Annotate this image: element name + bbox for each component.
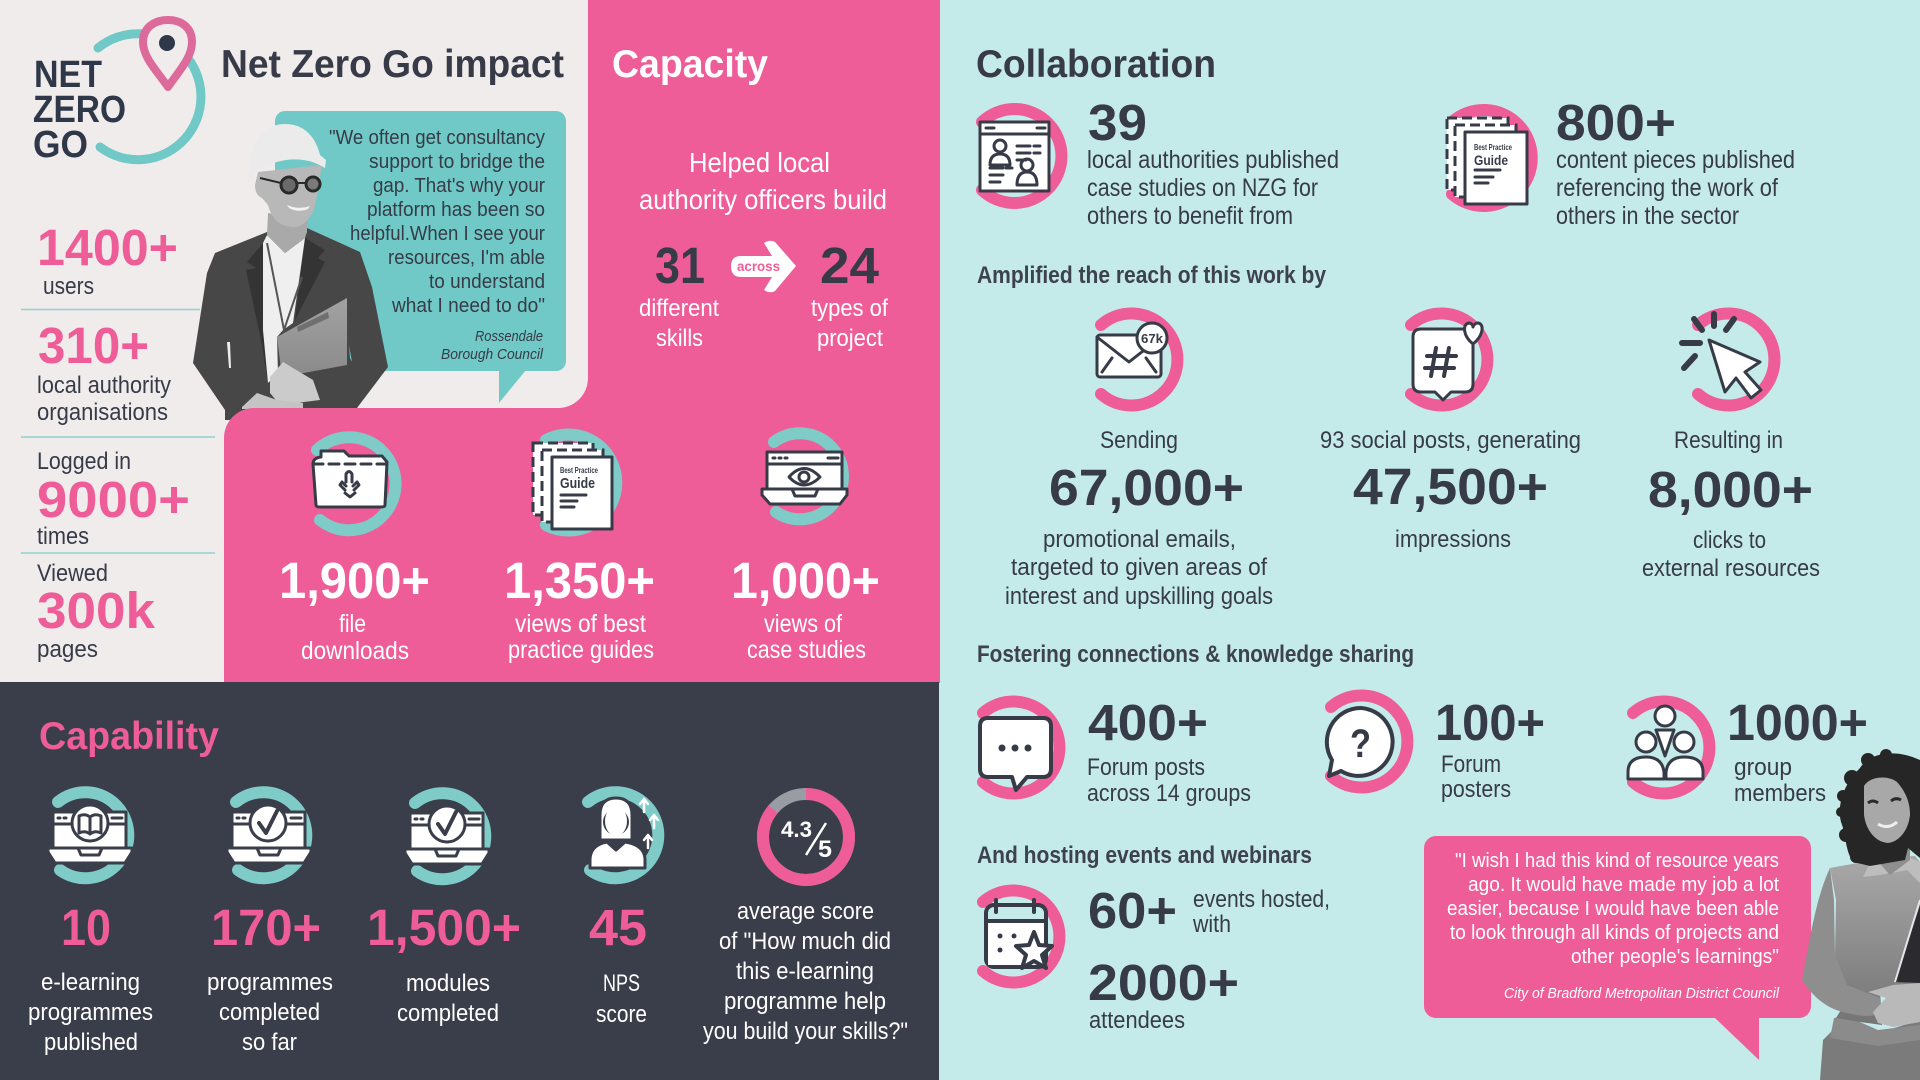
title: Net Zero Go impact: [221, 43, 564, 86]
icon: case study window: [980, 109, 1061, 203]
callout: Bradford quote: to look through all kinds of projects and: [1450, 922, 1779, 944]
stat: 400+ forum posts: across 14 groups: [1087, 780, 1251, 807]
arrow: across: across: [737, 258, 780, 274]
stat: 100+ forum posters: [1327, 694, 1545, 803]
callout: Bradford quote: easier, because I would have been able: [1447, 898, 1779, 920]
callout: Bradford quote: ago. It would have made my job a lot: [1468, 874, 1779, 896]
panel: capacity: [224, 0, 940, 683]
stat: 45 NPS score: NPS: [603, 970, 640, 997]
logo: Net Zero Go: [33, 20, 201, 166]
logo: Net Zero Go: NET: [34, 54, 102, 96]
donut chart: 4.3 out of 5: [763, 794, 849, 880]
stat: 47,500+ impressions: impressions: [1395, 526, 1511, 553]
stat: 39 local authorities: [980, 94, 1339, 230]
icon: calendar with star: [983, 890, 1059, 982]
stat: 67,000+ emails: [1005, 314, 1273, 610]
callout: Rossendale quote: support to bridge the: [369, 151, 545, 173]
stat: 800+ content pieces: others in the sector: [1556, 202, 1739, 230]
stat: 800+ content pieces: content pieces published: [1556, 146, 1795, 174]
donut chart: 4.3 out of 5: 4.3: [781, 817, 812, 842]
stat: 10 programmes: 10: [61, 899, 111, 956]
stat: 4.3 of 5 average score: [703, 794, 908, 1045]
stat: 1400+ users: [37, 219, 178, 300]
stat: 4.3 of 5 average score: of "How much did: [719, 928, 891, 955]
stat: 8,000+ clicks: clicks to: [1693, 527, 1766, 554]
subheading: amplified: Amplified the reach of this work by: [977, 262, 1327, 289]
stat: 310+ organisations: organisations: [37, 399, 168, 426]
panel: collaboration: [939, 0, 1920, 1080]
stat: 400+ forum posts: [980, 694, 1251, 807]
stat: 300k pages: [37, 560, 156, 663]
icon: person with rising arrows: [588, 792, 658, 878]
icon: email: [1097, 314, 1177, 406]
stat: 170+ completed: so far: [242, 1029, 297, 1056]
stat: 67,000+ emails: targeted to given areas of: [1011, 554, 1267, 581]
stat: events and attendees: events hosted,: [1193, 886, 1330, 913]
callout: Bradford quote: other people's learnings": [1571, 946, 1779, 968]
stat: 10 programmes: [28, 792, 153, 1056]
stat: 310+ organisations: [37, 317, 171, 426]
heading: collaboration: Collaboration: [976, 43, 1216, 86]
stat: 8,000+ clicks: external resources: [1642, 555, 1820, 582]
stat: 45 NPS score: score: [596, 1001, 647, 1028]
icon: laptop with eye: [762, 433, 847, 519]
stat: 10 programmes: published: [44, 1029, 138, 1056]
stat: 67,000+ emails: interest and upskilling goals: [1005, 583, 1273, 610]
icon: laptop with book: [48, 792, 132, 878]
stat: 310+ organisations: 310+: [38, 317, 149, 374]
stat: 47,500+ impressions: [1320, 314, 1581, 553]
heading: capacity: Capacity: [612, 43, 768, 86]
stat: 47,500+ impressions: 47,500+: [1353, 458, 1548, 515]
stat: 1,000+ case study views: case studies: [747, 636, 866, 664]
stat: 67,000+ emails: promotional emails,: [1043, 526, 1236, 553]
callout: Rossendale quote: gap. That's why your: [373, 175, 545, 197]
heading: capability: Capability: [39, 715, 219, 758]
stat: 300k pages: Viewed: [37, 560, 108, 587]
stat: 400+ forum posts: 400+: [1088, 694, 1208, 751]
stat: 1000+ group members: 1000+: [1727, 694, 1868, 751]
callout: Rossendale quote: Rossendale: [475, 328, 543, 345]
stat: 1,350+ guide views: 1,350+: [504, 552, 655, 609]
stat: 4.3 of 5 average score: average score: [737, 898, 874, 925]
stat: 170+ completed: programmes: [207, 969, 333, 996]
stat: 24 types of project: 24: [820, 237, 880, 294]
arrow: across: [731, 241, 796, 292]
stat: 800+ content pieces: [1447, 94, 1795, 230]
stat: 1,900+ file downloads: file: [339, 610, 366, 638]
stat: events and attendees: with: [1192, 911, 1231, 938]
stat: 8,000+ clicks: [1642, 314, 1820, 582]
stat: 1,500+ modules: 1,500+: [367, 899, 521, 956]
stat: 10 programmes: e-learning: [41, 969, 140, 996]
stat: 9000+ logins: times: [37, 523, 89, 550]
stat: events and attendees: attendees: [1089, 1007, 1185, 1034]
icon: email: 67k: [1141, 331, 1164, 346]
stat: 1,900+ file downloads: downloads: [301, 637, 409, 665]
photo: woman with folder: [1802, 749, 1920, 1080]
stat: 300k pages: pages: [37, 636, 98, 663]
stat: 100+ forum posters: Forum: [1441, 751, 1501, 778]
stat: 67,000+ emails: 67,000+: [1049, 459, 1244, 516]
icon: laptop with tick: [227, 792, 311, 878]
icon: cursor click: [1682, 314, 1774, 406]
text: helped local authority officers: Helped local: [689, 147, 830, 178]
photo: man in hard hat: [193, 124, 388, 420]
logo: Net Zero Go: GO: [33, 124, 88, 166]
stat: 1000+ group members: [1628, 694, 1868, 807]
stat: 1,900+ file downloads: 1,900+: [279, 552, 430, 609]
stat: 1000+ group members: group: [1734, 754, 1792, 781]
stat: 1,500+ modules: modules: [406, 970, 490, 997]
text: helped local authority officers: [639, 147, 887, 215]
stat: 100+ forum posters: posters: [1441, 776, 1511, 803]
stat: 47,500+ impressions: 93 social posts, generating: [1320, 427, 1581, 454]
subheading: fostering connections: Fostering connections & knowledge sharing: [977, 641, 1414, 668]
stat: 9000+ logins: [37, 448, 190, 550]
stat: 67,000+ emails: Sending: [1100, 427, 1178, 454]
icon: question bubble: [1327, 696, 1407, 788]
icon: best practice guide: [533, 434, 616, 530]
stat: 1,350+ guide views: practice guides: [508, 636, 654, 664]
subheading: events and webinars: And hosting events and webinars: [977, 842, 1312, 869]
callout: Rossendale quote: resources, I'm able: [388, 247, 545, 269]
stat: 9000+ logins: 9000+: [37, 471, 190, 528]
callout: Rossendale quote: platform has been so: [367, 199, 545, 221]
stat: 1400+ users: 1400+: [37, 219, 178, 276]
callout: Rossendale quote: "We often get consultancy: [329, 127, 545, 149]
stat: events and attendees: 2000+: [1088, 954, 1239, 1011]
icon: best practice guide: Guide: [1474, 152, 1508, 168]
stat: 39 local authorities: others to benefit from: [1087, 202, 1293, 230]
stat: 1,500+ modules: completed: [397, 1000, 499, 1027]
stat: 1,350+ guide views: views of best: [515, 610, 646, 638]
stat: 170+ completed: 170+: [211, 899, 321, 956]
callout: Bradford quote: [1424, 836, 1811, 1060]
stat: events and attendees: [983, 882, 1330, 1034]
callout: Bradford quote: "I wish I had this kind of resource years: [1455, 850, 1779, 872]
stat: 45 NPS score: [588, 792, 658, 1028]
callout: Rossendale quote: helpful.When I see your: [350, 223, 545, 245]
icon: chat bubble: [980, 702, 1059, 794]
stat: 1,900+ file downloads: [279, 437, 430, 665]
stat: 31 different skills: different: [639, 295, 719, 322]
stat: 8,000+ clicks: Resulting in: [1674, 427, 1783, 454]
stat: 1,000+ case study views: 1,000+: [731, 552, 880, 609]
icon: best practice guide: [1447, 110, 1532, 206]
stat: 1,000+ case study views: views of: [764, 610, 842, 638]
stat: 1000+ group members: members: [1734, 780, 1826, 807]
icon: best practice guide: Guide: [560, 475, 595, 492]
stat: 39 local authorities: local authorities published: [1087, 146, 1339, 174]
stat: 170+ completed: [207, 792, 333, 1056]
icon: laptop with tick: [405, 793, 489, 879]
stat: 10 programmes: programmes: [28, 999, 153, 1026]
stat: 4.3 of 5 average score: programme help: [724, 988, 886, 1015]
icon: folder: [313, 437, 396, 530]
stat: 4.3 of 5 average score: this e-learning: [736, 958, 874, 985]
stat: 31 different skills: skills: [656, 325, 703, 352]
stat: 1400+ users: users: [43, 273, 94, 300]
callout: Rossendale quote: to understand: [429, 271, 545, 293]
icon: best practice guide: Best Practice: [560, 466, 598, 475]
stat: 310+ organisations: local authority: [37, 372, 171, 399]
stat: 1,500+ modules: [367, 793, 521, 1027]
callout: Bradford quote: City of Bradford Metropolitan District Council: [1504, 985, 1780, 1002]
stat: 8,000+ clicks: 8,000+: [1648, 461, 1813, 518]
stat: 24 types of project: project: [817, 325, 883, 352]
callout: Rossendale quote: Borough Council: [441, 346, 544, 363]
text: helped local authority officers: authority officers build: [639, 184, 887, 215]
stat: 1,000+ case study views: [731, 433, 880, 664]
icon: question bubble: ?: [1350, 722, 1371, 766]
stat: 31 different skills: 31: [655, 237, 705, 294]
donut chart: 4.3 out of 5: 5: [818, 836, 832, 863]
stat: 100+ forum posters: 100+: [1435, 694, 1545, 751]
stat: 31 different skills: [639, 237, 719, 352]
stat: 24 types of project: types of: [811, 295, 888, 322]
stat: 45 NPS score: 45: [589, 899, 647, 956]
stat: 800+ content pieces: referencing the work of: [1556, 174, 1778, 202]
callout: Rossendale quote: [275, 111, 566, 403]
icon: group of people: [1628, 702, 1709, 794]
stat: 39 local authorities: case studies on NZG for: [1087, 174, 1318, 202]
stat: 170+ completed: completed: [219, 999, 320, 1026]
panel: capability: [0, 682, 939, 1080]
stat: 1,350+ guide views: [504, 434, 655, 664]
icon: social post: [1411, 314, 1487, 406]
stat: 24 types of project: [811, 237, 888, 352]
logo: Net Zero Go: ZERO: [33, 89, 126, 131]
stat: 39 local authorities: 39: [1088, 94, 1147, 151]
callout: Rossendale quote: what I need to do": [391, 295, 545, 317]
stat: 4.3 of 5 average score: you build your skills?": [703, 1018, 908, 1045]
stat: 800+ content pieces: 800+: [1556, 94, 1676, 151]
stat: 9000+ logins: Logged in: [37, 448, 131, 475]
icon: best practice guide: Best Practice: [1474, 143, 1512, 152]
stat: 400+ forum posts: Forum posts: [1087, 754, 1205, 781]
stat: events and attendees: 60+: [1088, 882, 1177, 939]
stat: 300k pages: 300k: [37, 582, 156, 639]
panel: reach stats: [21, 219, 215, 663]
